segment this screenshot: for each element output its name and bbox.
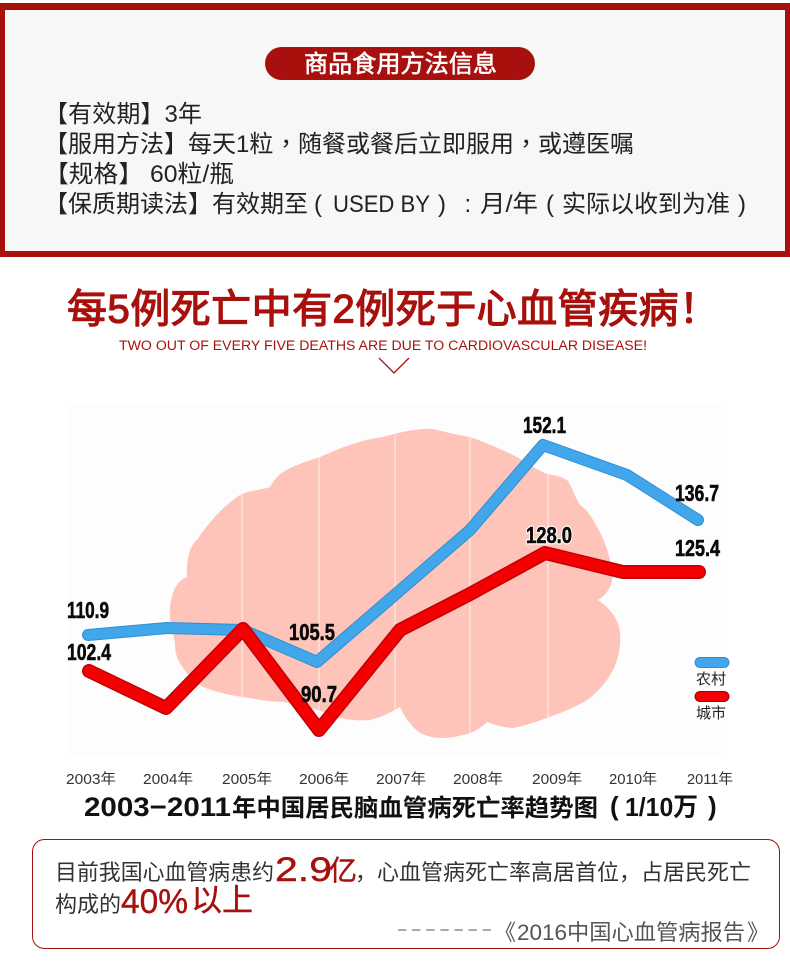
data labels: 136.7 xyxy=(675,480,719,506)
line: rural xyxy=(88,445,698,662)
chart title xyxy=(84,791,717,822)
data labels: 128.0 xyxy=(526,522,572,548)
usage text block: 随餐或餐后立即服用 xyxy=(298,131,514,158)
data labels: 128.0 xyxy=(526,522,572,548)
x axis years: 2006年 xyxy=(299,771,349,788)
data labels: 105.5 xyxy=(289,619,335,645)
callout line 1: 目前我国心血管病患约 xyxy=(55,860,274,885)
brain silhouette xyxy=(170,429,620,738)
x axis years: 2005年 xyxy=(222,771,272,788)
chart title: ( xyxy=(610,791,619,821)
usage text block: 【有效期】3年 xyxy=(44,101,202,128)
source: ––––––– xyxy=(398,921,492,938)
callout line 2: 40% xyxy=(121,883,188,921)
chart title: 年中国居民脑血管病死亡率趋势图 xyxy=(232,795,598,822)
x axis years: 2008年 xyxy=(453,771,503,788)
panel: product usage info xyxy=(0,3,790,257)
x axis years: 2004年 xyxy=(143,771,193,788)
callout: statistics xyxy=(32,840,780,948)
legend: 农村 xyxy=(696,671,726,688)
source: 《 xyxy=(494,920,516,945)
usage text block: 【服用方法】每天1粒 xyxy=(44,131,273,158)
usage text block: 实际以收到为准 xyxy=(562,191,730,218)
heading pill: 商品食用方法信息 xyxy=(304,51,497,78)
source: 2016 xyxy=(517,920,567,945)
usage text block xyxy=(44,101,746,218)
usage text block: ( xyxy=(546,191,554,218)
data labels: 152.1 xyxy=(523,412,566,438)
callout line 2 xyxy=(55,883,253,921)
data labels: 90.7 xyxy=(301,681,337,707)
heading pill xyxy=(265,47,535,80)
callout line 2: 以上 xyxy=(191,883,253,918)
x axis years: 2003年 xyxy=(66,771,116,788)
line: urban xyxy=(89,553,699,730)
icon: chevron down xyxy=(379,358,409,373)
data labels: 110.9 xyxy=(67,597,109,623)
usage text block: : xyxy=(464,191,471,218)
x axis years: 2010年 xyxy=(609,771,657,788)
usage text block: ， xyxy=(274,124,298,159)
callout line 1: ，心血管病死亡率高居首位，占居民死亡 xyxy=(355,860,751,885)
data labels: 102.4 xyxy=(67,639,111,665)
data labels xyxy=(67,412,720,707)
chart title: 1/10万 xyxy=(625,792,698,822)
x axis years: 2011年 xyxy=(687,771,733,788)
source: 中国心血管病报告 xyxy=(567,920,745,945)
usage text block: ( xyxy=(314,191,322,218)
main headline: 每5例死亡中有2例死于心血管疾病！ xyxy=(67,288,719,332)
x axis years xyxy=(66,771,733,788)
usage text block: 月/年 xyxy=(480,191,538,218)
x axis years: 2007年 xyxy=(376,771,426,788)
chart title: 2003−2011 xyxy=(84,792,231,822)
usage text block: ) xyxy=(738,191,746,218)
x axis years: 2009年 xyxy=(532,771,582,788)
usage text block: 【规格】 60粒/瓶 xyxy=(44,161,234,188)
english subtitle: TWO OUT OF EVERY FIVE DEATHS ARE DUE TO CARDIOVASCULAR DISEASE! xyxy=(119,338,647,353)
usage text block: ， xyxy=(514,124,538,159)
legend xyxy=(695,658,729,722)
usage text block: ) xyxy=(438,191,446,218)
callout line 1 xyxy=(55,851,751,889)
usage text block: 或遵医嘱 xyxy=(538,131,634,158)
chart: mortality trend on brain background xyxy=(66,405,733,788)
data labels: 125.4 xyxy=(675,535,720,561)
usage text block: USED BY xyxy=(333,191,430,218)
source: 》 xyxy=(747,920,769,945)
callout line 1: 2.9 xyxy=(275,851,332,889)
source xyxy=(398,920,769,945)
callout line 1: 亿 xyxy=(329,855,357,886)
usage text block: 【保质期读法】有效期至 xyxy=(44,191,308,218)
callout line 2: 构成的 xyxy=(55,892,121,917)
chart title: ) xyxy=(708,791,717,821)
legend: 城市 xyxy=(696,705,726,722)
